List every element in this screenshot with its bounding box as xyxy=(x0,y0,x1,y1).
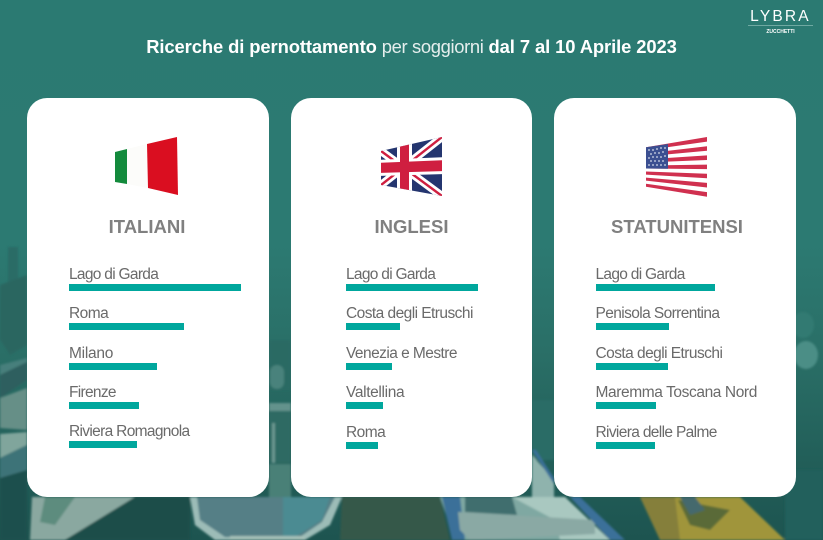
bar: Maremma Toscana Nord xyxy=(596,384,757,409)
heading: statunitensi: STATUNITENSI xyxy=(611,216,743,237)
bar: Penisola Sorrentina xyxy=(596,305,720,330)
panel: statunitensi xyxy=(554,98,796,497)
bar: Milano xyxy=(69,345,157,370)
bar: Valtellina: Valtellina xyxy=(346,384,404,401)
bar chart: italiani xyxy=(69,266,241,448)
bar: Riviera Romagnola: Riviera Romagnola xyxy=(69,423,189,440)
panel: italiani xyxy=(27,98,269,497)
bar: Costa degli Etruschi xyxy=(346,305,473,330)
bar: Costa degli Etruschi: Costa degli Etruschi xyxy=(596,345,722,362)
bar: Lago di Garda: Lago di Garda xyxy=(596,266,685,283)
bar: Penisola Sorrentina: Penisola Sorrentina xyxy=(596,305,719,322)
bar: Milano: Milano xyxy=(69,345,113,362)
bar: Roma xyxy=(69,305,184,330)
bar: Firenze: Firenze xyxy=(69,384,116,401)
logo: Lybra Zucchetti: LYBRA xyxy=(750,8,811,25)
icon: Italian flag xyxy=(115,137,178,195)
bar: Lago di Garda xyxy=(69,266,241,291)
logo: Lybra Zucchetti xyxy=(748,8,813,35)
icon: USA flag xyxy=(646,137,707,197)
bar: Costa degli Etruschi xyxy=(596,345,722,370)
bar: Costa degli Etruschi: Costa degli Etruschi xyxy=(346,305,473,322)
bar: Roma xyxy=(346,424,386,449)
title: Ricerche di pernottamento per soggiorni dal 7 al 10 Aprile 2023 xyxy=(146,36,677,57)
heading: inglesi: INGLESI xyxy=(374,216,448,237)
bar chart: inglesi xyxy=(346,266,478,449)
bar: Venezia e Mestre: Venezia e Mestre xyxy=(346,345,457,362)
bar: Lago di Garda: Lago di Garda xyxy=(69,266,158,283)
bar chart: statunitensi xyxy=(596,266,757,449)
bar: Riviera Romagnola xyxy=(69,423,190,448)
bar: Lago di Garda: Lago di Garda xyxy=(346,266,435,283)
bar: Firenze xyxy=(69,384,139,409)
heading: italiani: ITALIANI xyxy=(109,216,185,237)
bar: Roma: Roma xyxy=(69,305,108,322)
bar: Riviera delle Palme xyxy=(596,424,717,449)
bar: Lago di Garda xyxy=(346,266,478,291)
bar: Valtellina xyxy=(346,384,405,409)
panel: inglesi xyxy=(291,98,532,497)
icon: UK flag xyxy=(381,137,442,196)
bar: Maremma Toscana Nord: Maremma Toscana Nord xyxy=(596,384,757,401)
bar: Venezia e Mestre xyxy=(346,345,457,370)
bar: Lago di Garda xyxy=(596,266,715,291)
bar: Riviera delle Palme: Riviera delle Palme xyxy=(596,424,717,441)
bar: Roma: Roma xyxy=(346,424,385,441)
logo: Lybra Zucchetti: ZUCCHETTI xyxy=(766,29,795,35)
